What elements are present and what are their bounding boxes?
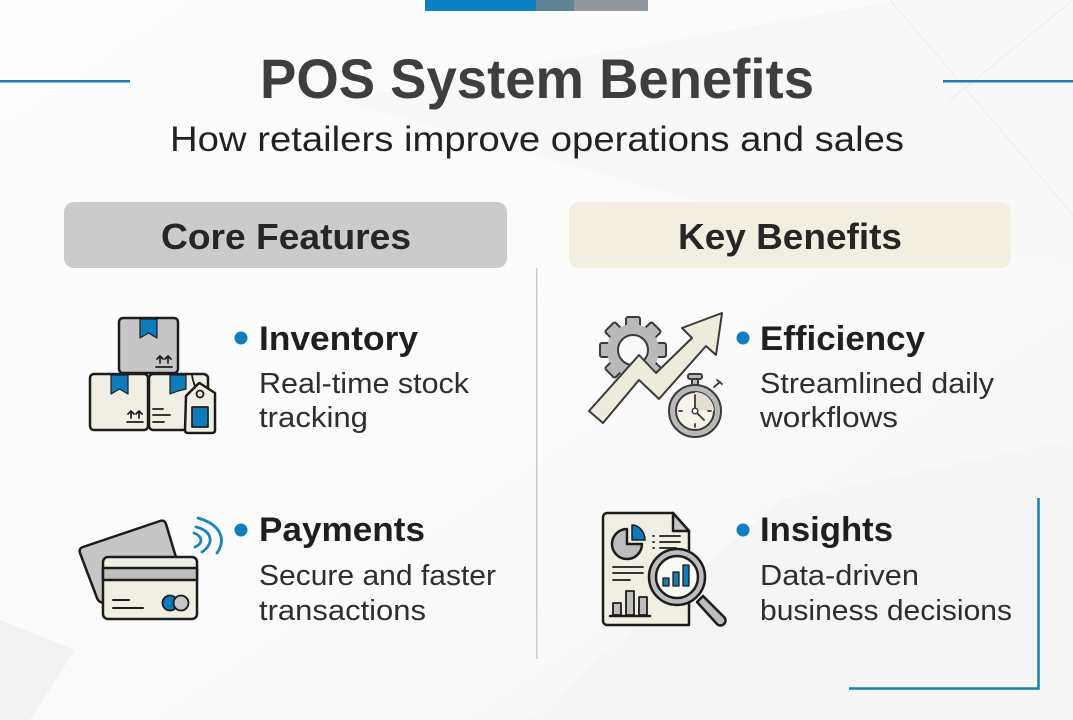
heading: Inventory <box>259 320 418 358</box>
column divider <box>536 268 538 659</box>
feature: payments <box>80 511 496 627</box>
icon: gear, rising arrow and stopwatch <box>589 313 722 437</box>
top accent bar <box>425 0 648 11</box>
benefit: insights <box>603 511 1012 627</box>
description: transactions <box>259 595 426 627</box>
description <box>259 560 496 627</box>
description <box>259 368 470 434</box>
benefit: efficiency <box>589 313 995 437</box>
right accent line <box>943 80 1073 82</box>
description <box>759 368 995 434</box>
title: POS System Benefits <box>260 47 814 110</box>
panel header: core features: Core Features <box>161 216 411 257</box>
left accent line <box>0 80 130 82</box>
icon: payment cards with contactless waves <box>80 518 221 619</box>
bullet <box>234 332 248 344</box>
heading: Payments <box>259 511 425 549</box>
panel header: key benefits: Key Benefits <box>678 216 902 257</box>
heading: Insights <box>760 511 893 549</box>
description: Real-time stock <box>259 368 470 400</box>
bottom right corner bracket <box>849 498 1038 688</box>
heading: Efficiency <box>760 320 925 358</box>
description: Data-driven <box>760 560 919 592</box>
description: Secure and faster <box>259 560 496 592</box>
icon: report with magnifying glass <box>603 513 726 626</box>
icon: boxes with price tag <box>90 318 215 433</box>
description: tracking <box>259 402 368 434</box>
description <box>760 560 1012 627</box>
description: business decisions <box>760 595 1012 627</box>
panel header: key benefits <box>569 202 1011 268</box>
bullet <box>234 524 248 536</box>
description: Streamlined daily <box>760 368 995 400</box>
bullet <box>736 332 750 344</box>
panel header: core features <box>64 202 507 268</box>
bullet <box>736 524 750 536</box>
feature: inventory <box>90 318 470 434</box>
subtitle: How retailers improve operations and sales <box>170 120 904 159</box>
description: workflows <box>759 402 898 434</box>
